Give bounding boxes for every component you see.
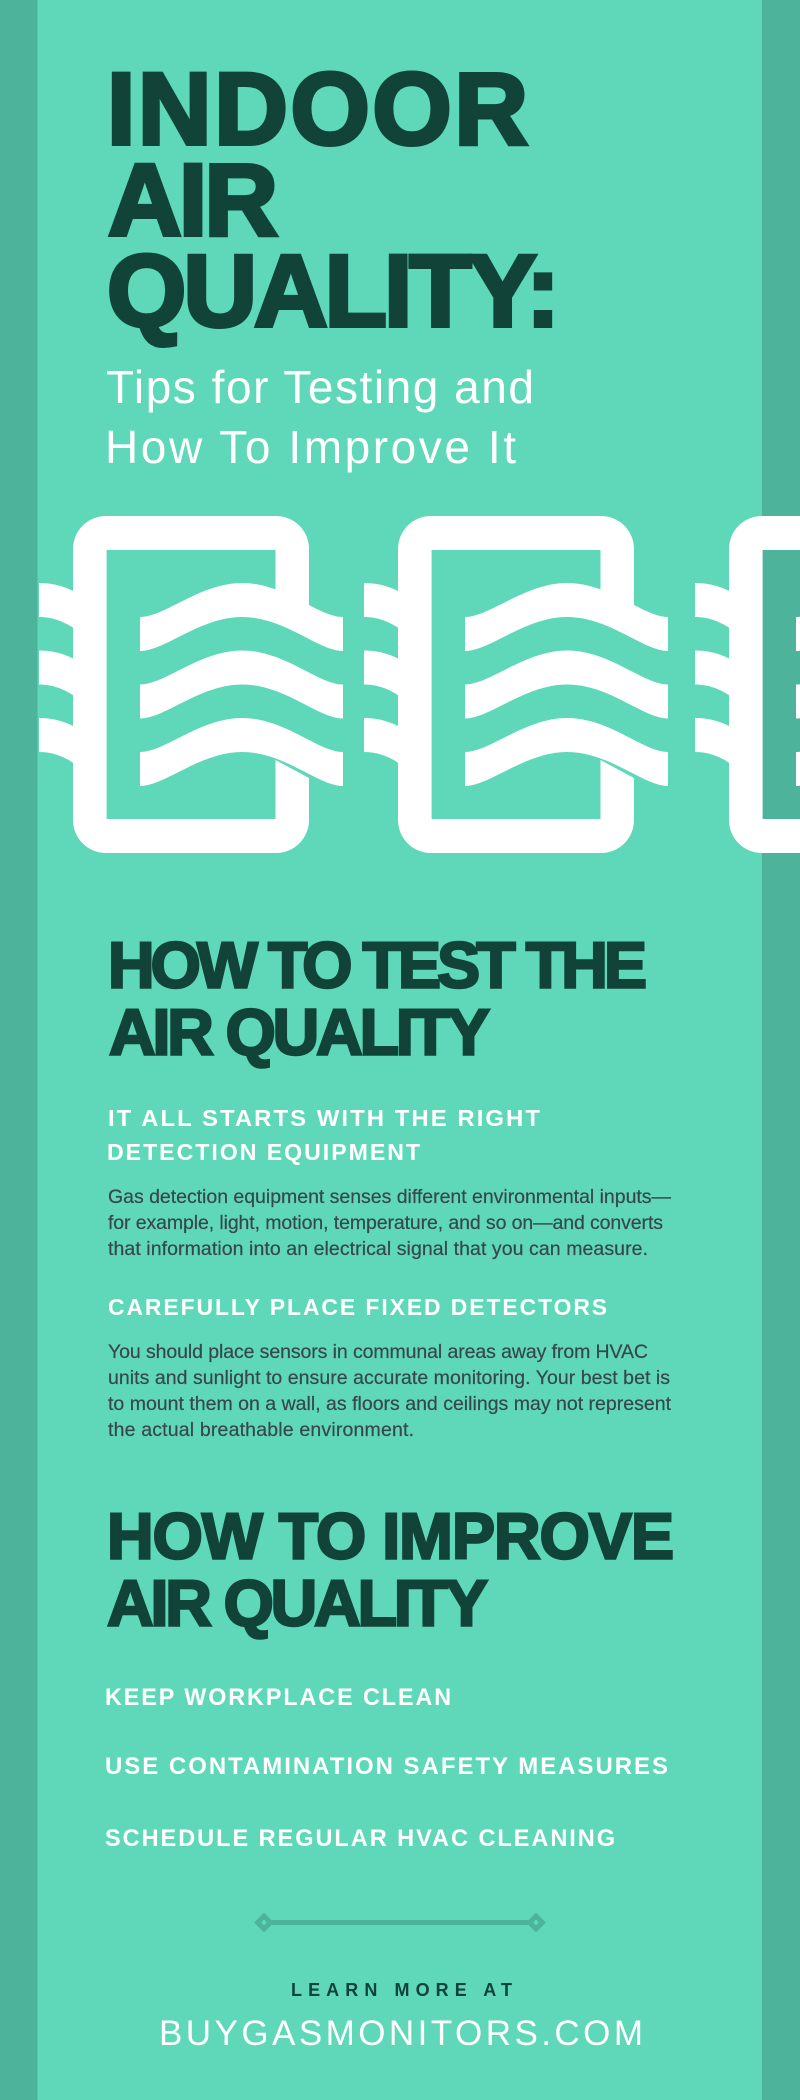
text block: fixed detectors: the actual breathable environment. [108, 1419, 414, 1441]
text block: detection equipment [108, 1186, 672, 1260]
heading: how to improve [107, 1501, 674, 1640]
list: improvement tips: KEEP WORKPLACE CLEAN [105, 1684, 453, 1711]
text block: detection equipment: that information into an electrical signal that you can measure. [108, 1238, 648, 1260]
list: improvement tips: SCHEDULE REGULAR HVAC CLEANING [105, 1825, 617, 1852]
title: INDOOR [107, 52, 528, 166]
heading: how to improve: AIR QUALITY [107, 1568, 488, 1640]
text block: fixed detectors: to mount them on a wall, as floors and ceilings may not represent [108, 1393, 672, 1415]
text block: detection equipment: for example, light, motion, temperature, and so on—and converts [108, 1212, 663, 1234]
subheading: detection equipment: DETECTION EQUIPMENT [107, 1139, 422, 1165]
subtitle: Tips for Testing and [106, 361, 534, 413]
title [107, 52, 560, 348]
icon: air filter 3 cropped at edge [695, 516, 800, 853]
title: QUALITY: [107, 234, 560, 348]
divider [258, 1916, 542, 1929]
heading: how to test [108, 930, 647, 1069]
heading: how to test: AIR QUALITY [109, 997, 490, 1069]
heading: how to improve: HOW TO IMPROVE [107, 1501, 674, 1573]
subtitle: How To Improve It [105, 421, 516, 473]
subheading: detection equipment [107, 1105, 542, 1165]
text block: fixed detectors: You should place sensors in communal areas away from HVAC [108, 1341, 648, 1363]
left side band [0, 0, 38, 2100]
subheading: fixed detectors: CAREFULLY PLACE FIXED DETECTORS [108, 1294, 609, 1320]
text block: detection equipment: Gas detection equipment senses different environmental inputs— [108, 1186, 672, 1208]
text block: fixed detectors: units and sunlight to ensure accurate monitoring. Your best bet is [108, 1367, 670, 1389]
text block: fixed detectors [108, 1341, 672, 1441]
heading: how to test: HOW TO TEST THE [108, 930, 647, 1002]
list: improvement tips [105, 1684, 670, 1852]
icon: air filter 1 [39, 516, 343, 853]
website url: BUYGASMONITORS.COM [159, 2014, 643, 2053]
list: improvement tips: USE CONTAMINATION SAFETY MEASURES [105, 1753, 670, 1780]
call to action label: LEARN MORE AT [291, 1980, 512, 2000]
icon: air filter 2 [364, 516, 668, 853]
subtitle [105, 361, 534, 473]
title: AIR [108, 143, 278, 257]
right side band [762, 0, 800, 2100]
subheading: detection equipment: IT ALL STARTS WITH THE RIGHT [108, 1105, 542, 1131]
